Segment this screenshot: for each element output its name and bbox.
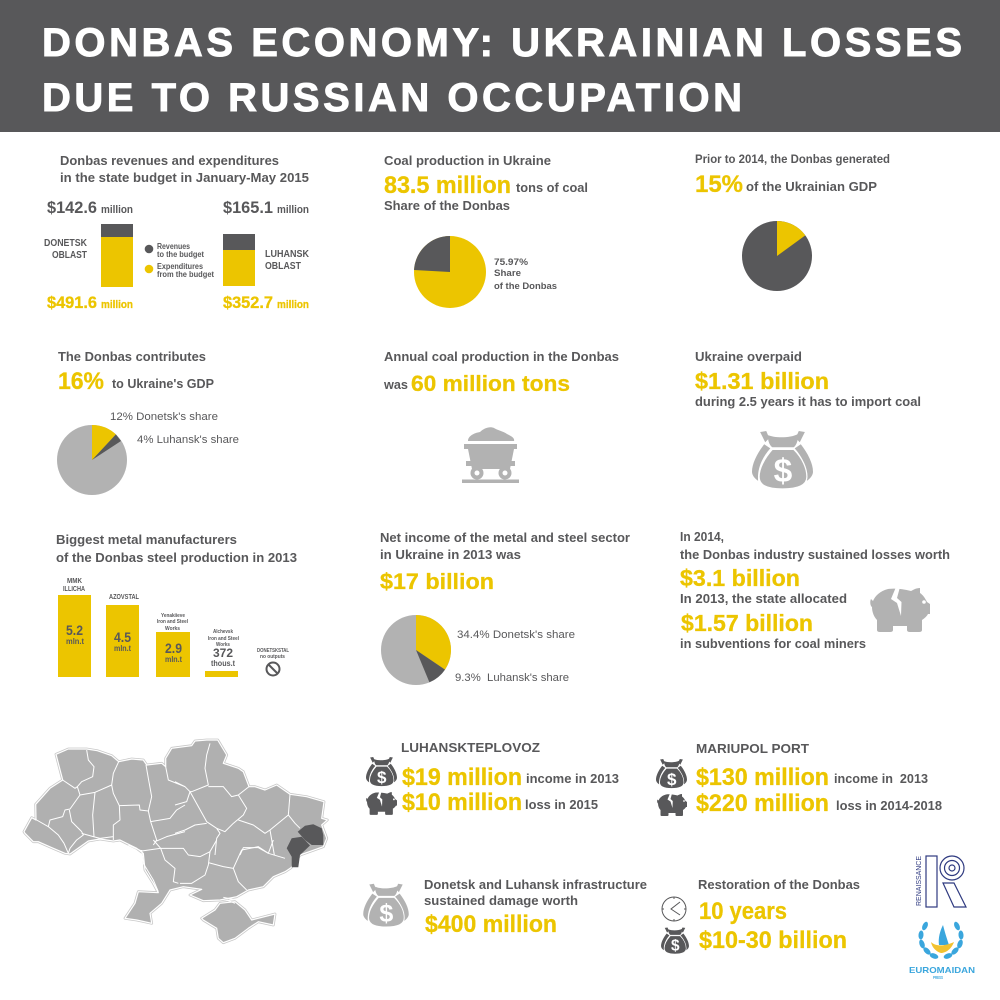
- heading: Luhanskteplovoz: LUHANSKTEPLOVOZ: [401, 740, 540, 755]
- panel: Donbas contributes: [57, 349, 239, 495]
- highlighted regions: Donetsk and Luhansk: [287, 824, 323, 867]
- text block: industry losses: $3.1 billion: [680, 565, 800, 591]
- pie label: coal share: 75.97%: [494, 257, 528, 267]
- map silhouette: [24, 740, 327, 943]
- bar: MMK Illicha: ILLICHA: [63, 586, 85, 593]
- heading: metal manufacturers: Biggest metal manufacturers: [56, 532, 237, 547]
- bar: Azovstal: 4.5: [114, 629, 131, 645]
- Luhansk label: LUHANSK: [265, 249, 310, 260]
- bar: Yenakiieve: 2.9: [165, 640, 182, 656]
- bar: Alchevsk: Iron and Steel: [208, 636, 239, 642]
- Luhansk expenditures figure: [223, 293, 309, 312]
- pie label: coal share: of the Donbas: [494, 281, 557, 291]
- heading: GDP prior to 2014: 15%: [695, 171, 743, 198]
- heading: budget: Donbas revenues and expenditures: [60, 153, 279, 168]
- text block: infrastructure: sustained damage worth: [424, 893, 578, 908]
- pie labels: GDP 16%: 4% Luhansk's share: [137, 434, 239, 446]
- bar: Azovstal: mln.t: [114, 644, 131, 653]
- pie labels: GDP 16%: [110, 411, 239, 446]
- bar: Alchevsk: [205, 629, 239, 677]
- Donetsk revenues figure: [47, 198, 133, 217]
- heading: annual coal: was: [383, 377, 408, 392]
- icon: mine cart: [462, 427, 519, 483]
- Luhansk expenditures figure: million: [277, 299, 309, 311]
- panel: coal production: [384, 153, 588, 308]
- bar: Yenakiieve: Yenakiieve: [161, 613, 185, 619]
- income figure: income in 2013: [526, 771, 619, 786]
- pie chart: metal income: [381, 615, 451, 685]
- heading: annual coal: Annual coal production in the Donbas: [384, 349, 619, 364]
- panel: annual coal production: [383, 349, 619, 483]
- bar: Alchevsk: Alchevsk: [213, 629, 234, 635]
- Donetsk label: OBLAST: [52, 250, 87, 261]
- map regions: fill and borders: [24, 740, 327, 943]
- heading: coal production: Coal production in Ukraine: [384, 153, 551, 168]
- heading: coal production: 83.5 million: [384, 172, 511, 199]
- text block: infrastructure: Donetsk and Luhansk infrastructure: [424, 877, 647, 892]
- bar: Azovstal: AZOVSTAL: [109, 594, 140, 601]
- heading: net income: in Ukraine in 2013 was: [380, 547, 521, 562]
- pie labels: metal income: [455, 629, 575, 684]
- legend: Expenditures: [157, 262, 203, 271]
- heading: GDP prior to 2014: Prior to 2014, the Donbas generated: [695, 154, 890, 166]
- bar: Yenakiieve: Iron and Steel: [157, 619, 188, 625]
- Luhansk expenditures figure: $352.7: [223, 293, 273, 312]
- panel: Luhanskteplovoz: [366, 740, 619, 816]
- heading: GDP prior to 2014: [695, 154, 890, 198]
- heading: contributes: to Ukraine's GDP: [112, 376, 214, 391]
- title banner: DUE TO RUSSIAN OCCUPATION: [42, 76, 742, 120]
- panel: industry losses: [680, 529, 950, 651]
- Donetsk expenditures figure: million: [101, 299, 133, 311]
- heading: overpaid: $1.31 billion: [695, 368, 829, 394]
- loss figure: $10 million: [402, 789, 522, 816]
- Donetsk stacked bar: [101, 224, 133, 287]
- panel: net income metal and steel: [380, 530, 630, 685]
- legend: from the budget: [157, 270, 214, 279]
- income figure: [696, 764, 928, 791]
- loss figure: [696, 790, 942, 817]
- heading: GDP prior to 2014: of the Ukrainian GDP: [746, 179, 877, 194]
- heading: budget: in the state budget in January-May 2015: [60, 170, 309, 185]
- figure: cost: $10-30 billion: [699, 927, 847, 954]
- pie chart: GDP 16%: [57, 425, 127, 495]
- panel: budget revenues and expenditures: [44, 153, 310, 312]
- icon: money bag: [752, 431, 813, 490]
- bar: Alchevsk: Works: [216, 642, 230, 648]
- logo: Euromaidan Press: [909, 921, 975, 980]
- panel: restoration of the Donbas: [661, 877, 860, 955]
- heading: coal production: [384, 153, 588, 213]
- text block: industry losses: [680, 529, 950, 651]
- bar: MMK Illicha: mln.t: [66, 637, 84, 646]
- bar: Yenakiieve: [156, 613, 190, 677]
- income figure: income in 2013: [834, 771, 928, 786]
- figure: 10 years: 10 years: [699, 898, 787, 925]
- Donetskstal no outputs: no outputs: [260, 654, 285, 660]
- income figure: [402, 764, 619, 791]
- Luhansk revenues figure: million: [277, 204, 309, 216]
- Donetsk label: [44, 238, 88, 261]
- pie label: coal share: [494, 257, 557, 291]
- heading: contributes: The Donbas contributes: [58, 349, 206, 364]
- Luhansk label: OBLAST: [265, 261, 301, 272]
- panel: Mariupol port: [656, 741, 942, 817]
- heading: net income: $17 billion: [380, 569, 494, 594]
- heading: net income: [380, 530, 630, 594]
- bar: Azovstal: [106, 594, 140, 677]
- panel: GDP prior to 2014: [695, 154, 890, 291]
- bar: Alchevsk: 372: [213, 646, 233, 660]
- Donetsk revenues figure: $142.6: [47, 198, 97, 217]
- legend: to the budget: [157, 250, 204, 259]
- heading: metal manufacturers: of the Donbas steel production in 2013: [56, 550, 297, 565]
- text block: industry losses: the Donbas industry sustained losses worth: [680, 547, 950, 562]
- heading: annual coal: [383, 349, 619, 396]
- bar: Yenakiieve: Works: [165, 626, 180, 632]
- bar: Alchevsk: thous.t: [211, 658, 235, 668]
- bar: MMK Illicha: MMK: [67, 578, 82, 585]
- text block: industry losses: In 2014,: [680, 529, 724, 544]
- heading: coal production: tons of coal: [516, 180, 588, 195]
- Donetsk label: DONETSK: [44, 238, 88, 249]
- pie chart: GDP 15%: [742, 221, 812, 291]
- heading: budget: [60, 153, 309, 185]
- map of Ukraine: [24, 740, 327, 943]
- income figure: $130 million: [696, 764, 829, 791]
- bar: MMK Illicha: [58, 578, 91, 677]
- logo: Renaissance: RENAISSANCE: [916, 856, 923, 906]
- panel: metal manufacturers: [56, 532, 297, 677]
- icon: clock: [662, 897, 686, 921]
- heading: overpaid: Ukraine overpaid: [695, 349, 802, 364]
- legend: [145, 242, 214, 279]
- loss figure: $220 million: [696, 790, 829, 817]
- panel: infrastructure damage: [363, 877, 647, 938]
- Donetsk revenues figure: million: [101, 204, 133, 216]
- Donetskstal no outputs: DONETSKSTAL: [257, 648, 289, 654]
- pie labels: metal income: 9.3% Luhansk's share: [455, 672, 569, 684]
- heading: coal production: Share of the Donbas: [384, 198, 510, 213]
- heading: overpaid: during 2.5 years it has to import coal: [695, 394, 921, 409]
- pie chart: coal share: [414, 236, 486, 308]
- icon: dark money bag: [656, 759, 687, 789]
- icon: light money bag: [363, 884, 409, 928]
- icon: dark money bag: [366, 757, 397, 787]
- logo: Euromaidan Press: EUROMAIDAN: [909, 965, 975, 975]
- title banner: [0, 0, 1000, 132]
- heading: contributes: [58, 349, 214, 395]
- heading: metal manufacturers: [56, 532, 297, 565]
- heading: contributes: 16%: [58, 368, 104, 395]
- icon: dark money bag: [661, 927, 689, 955]
- text block: industry losses: $1.57 billion: [681, 610, 813, 636]
- Donetsk expenditures figure: $491.6: [47, 293, 97, 312]
- Luhansk stacked bar: [223, 234, 255, 286]
- loss figure: loss in 2015: [525, 797, 598, 812]
- icon: broken piggy bank: [870, 587, 930, 632]
- Donetskstal no outputs: [257, 648, 289, 676]
- text block: industry losses: in subventions for coal miners: [680, 636, 866, 651]
- bar: MMK Illicha: 5.2: [66, 622, 83, 638]
- income figure: $19 million: [402, 764, 522, 791]
- Luhansk revenues figure: [223, 198, 309, 217]
- legend: Revenues: [157, 242, 190, 251]
- icon: dark piggy bank: [657, 794, 687, 816]
- heading: net income: Net income of the metal and steel sector: [380, 530, 630, 545]
- heading: Mariupol port: MARIUPOL PORT: [696, 741, 809, 756]
- pie label: coal share: Share: [494, 268, 521, 278]
- Luhansk revenues figure: $165.1: [223, 198, 273, 217]
- logo: Renaissance: [916, 856, 966, 907]
- text block: infrastructure: $400 million: [425, 911, 557, 938]
- loss figure: loss in 2014-2018: [836, 798, 942, 813]
- pie labels: metal income: 34.4% Donetsk's share: [457, 629, 575, 641]
- text block: industry losses: In 2013, the state allocated: [680, 591, 847, 606]
- text block: infrastructure: [424, 877, 647, 938]
- heading: restoration: Restoration of the Donbas: [698, 877, 860, 892]
- panel: Ukraine overpaid: [695, 349, 921, 490]
- title banner: DONBAS ECONOMY: UKRAINIAN LOSSES: [42, 21, 962, 65]
- heading: annual coal: 60 million tons: [411, 371, 570, 396]
- icon: dark piggy bank: [366, 792, 397, 815]
- Luhansk label: [265, 249, 310, 272]
- logo: Euromaidan Press: PRESS: [933, 975, 943, 980]
- bar: Yenakiieve: mln.t: [165, 655, 182, 664]
- loss figure: [402, 789, 598, 816]
- pie labels: GDP 16%: 12% Donetsk's share: [110, 411, 218, 423]
- heading: overpaid: [695, 349, 921, 409]
- Donetsk expenditures figure: [47, 293, 133, 312]
